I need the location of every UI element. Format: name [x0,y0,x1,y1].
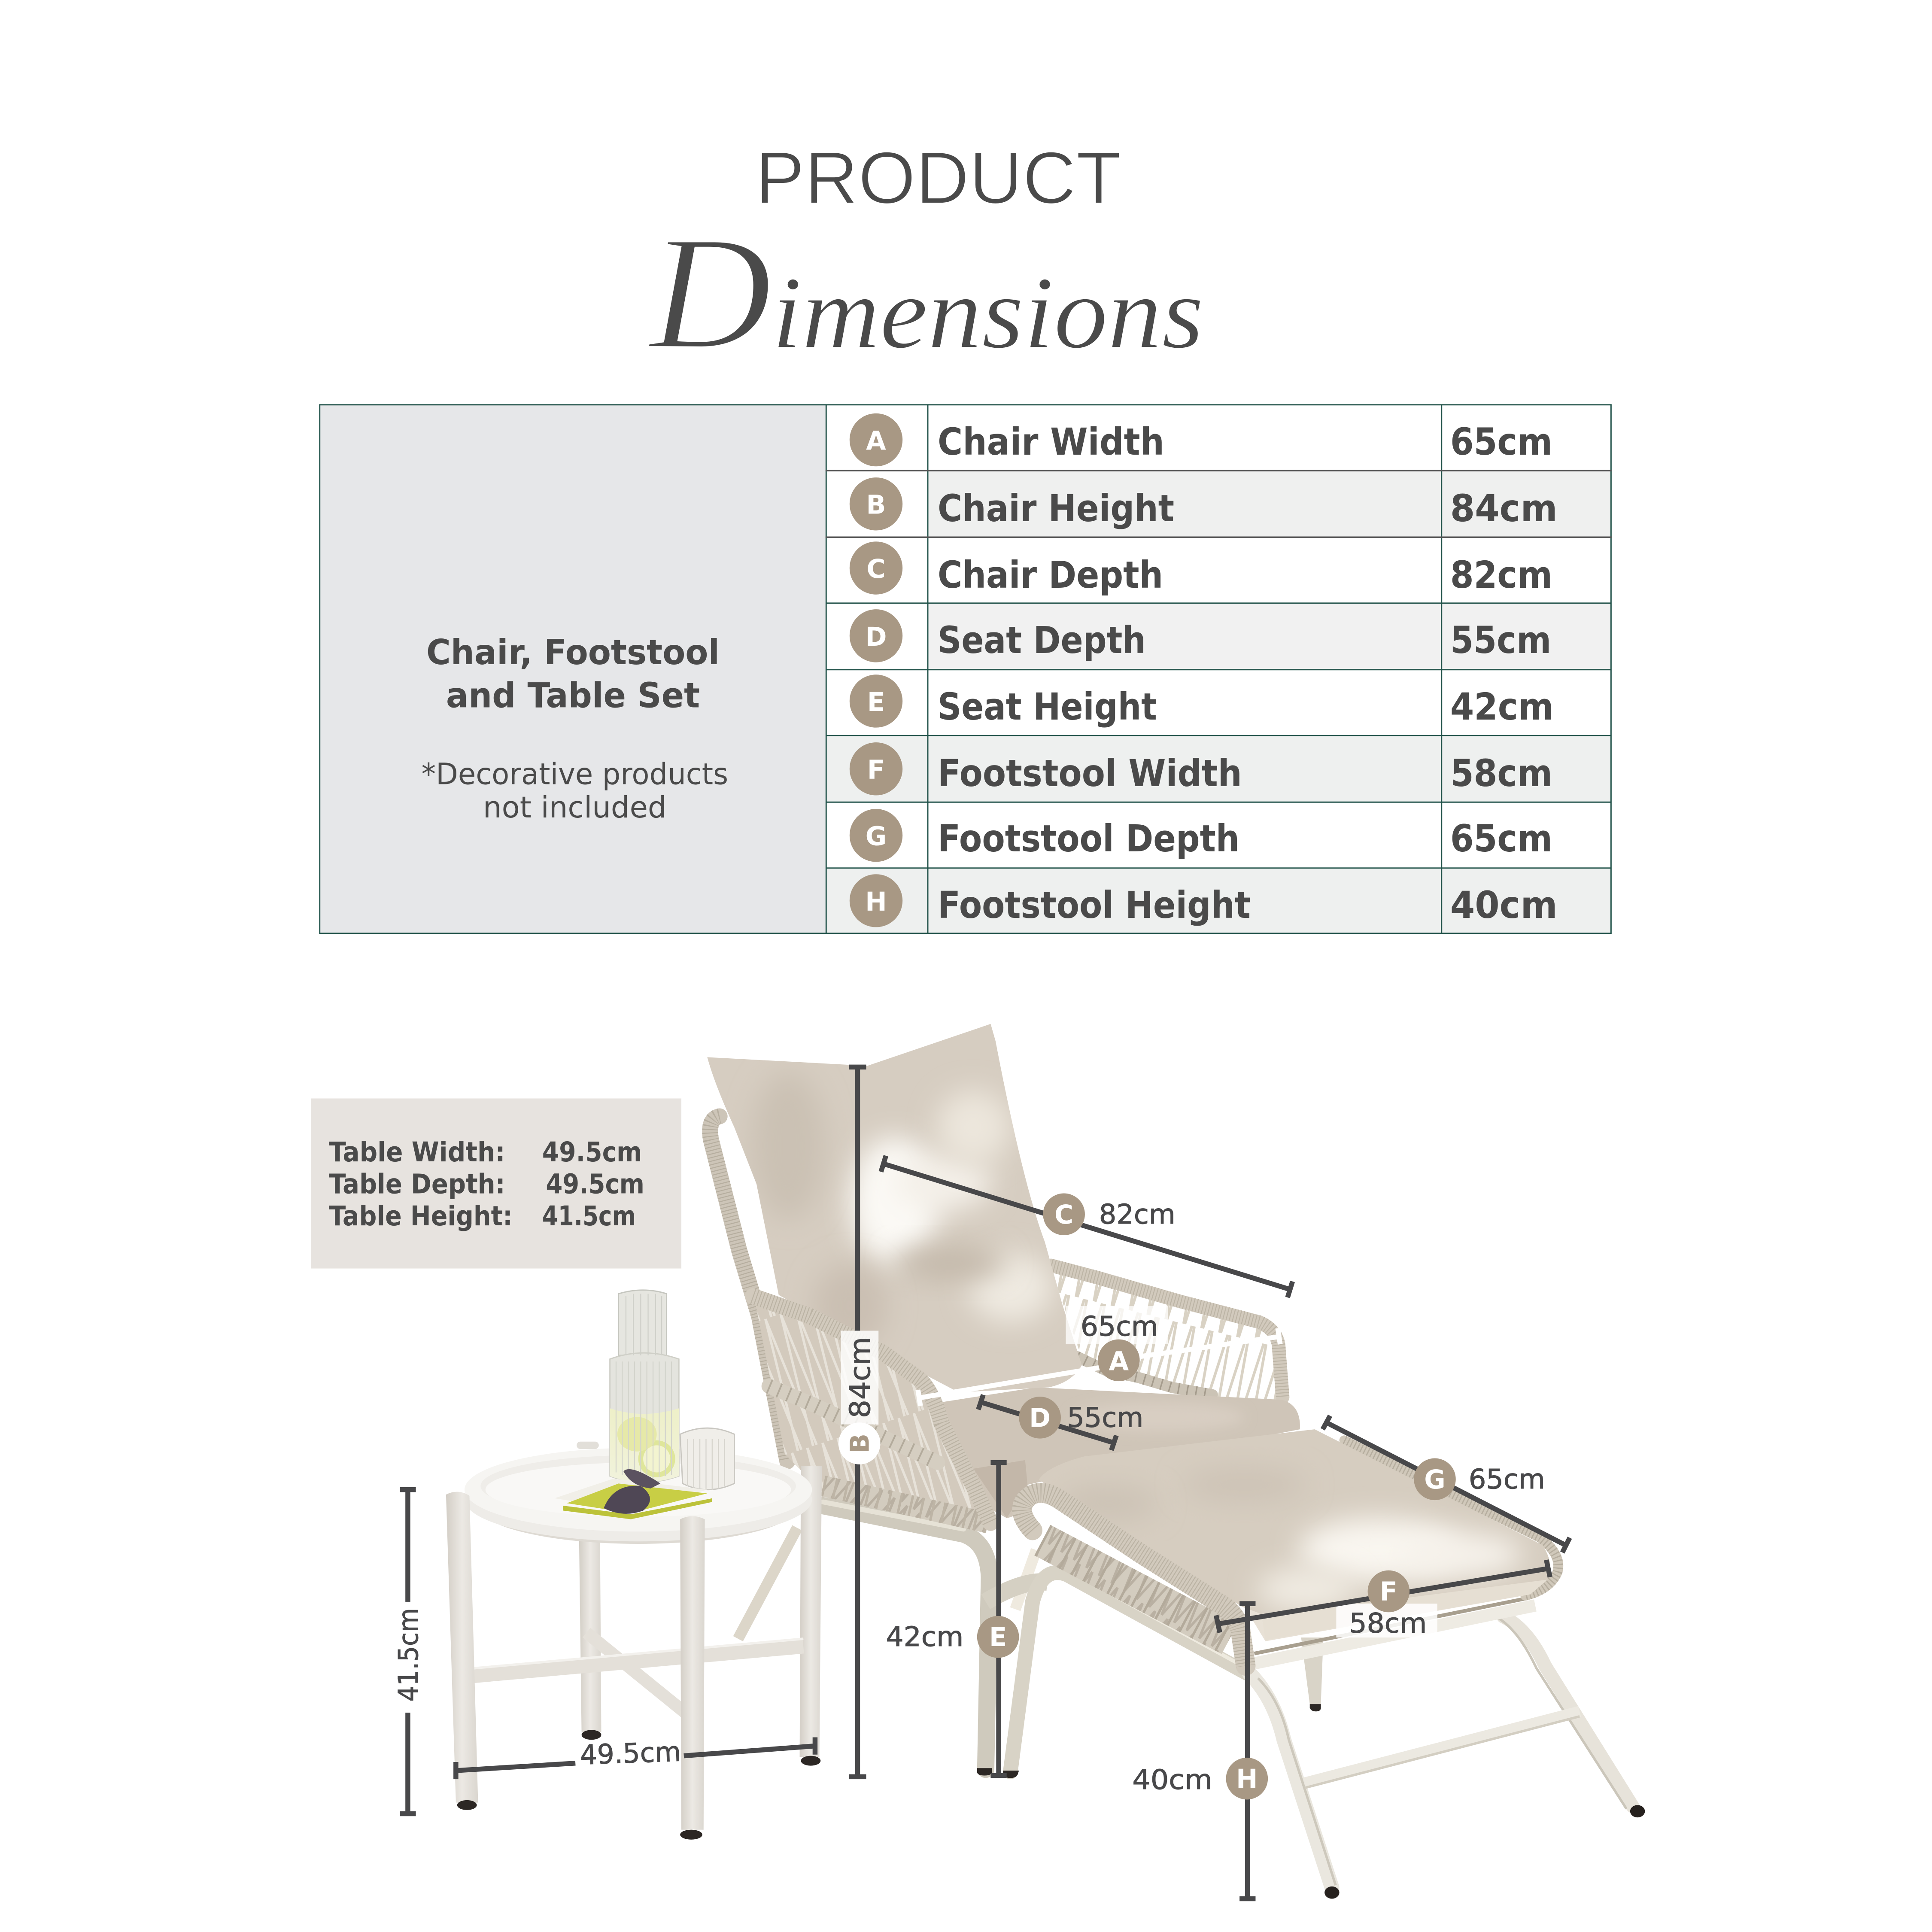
chair rear leg [738,1528,797,1639]
row F: Footstool Width [938,752,1242,795]
row E: E [867,687,885,717]
row C: C [866,554,886,584]
panel: table dimensions: 49.5cm [546,1168,644,1200]
specification table [320,404,1612,934]
title: PRODUCT: PRODUCT [755,137,1121,219]
set name heading [426,632,720,715]
row B: Chair Height [938,487,1174,530]
panel: table dimensions: 41.5cm [542,1200,636,1232]
row E: 42cm [1450,686,1554,729]
dimension A: chair width [918,1306,1280,1406]
panel: table dimensions [311,1099,681,1269]
dimension B: chair height: B [845,1434,875,1453]
panel: table dimensions: Table Height: [329,1200,513,1232]
row F: F [867,755,885,785]
dimension D: seat depth: 55cm [1067,1401,1143,1433]
row D: D [865,622,887,652]
dimension H: footstool height [1132,1604,1268,1899]
row H [850,874,1558,927]
panel: set description [320,404,826,934]
row B [850,477,1558,530]
bottom woven rail [823,1486,988,1523]
row C [850,541,1552,597]
panel: table dimensions: 49.5cm [542,1136,642,1168]
sunglasses [604,1469,660,1514]
row G [850,809,1552,862]
dimension E: seat height: E [989,1622,1007,1653]
dimension A: chair width: 65cm [1081,1310,1158,1342]
footstool rear leg [1301,1637,1323,1704]
dimension F: footstool width [1216,1560,1550,1639]
dimension H: footstool height: 40cm [1132,1764,1212,1795]
row A: A [866,426,886,456]
row G: 65cm [1450,817,1552,860]
dimension F: footstool width: 58cm [1349,1607,1427,1639]
footstool crossbar [1305,1711,1580,1783]
row A: 65cm [1450,421,1552,464]
row D: 55cm [1450,619,1551,662]
left arm rope [753,1296,990,1523]
dimension G: footstool depth: 65cm [1469,1463,1545,1495]
panel: table dimensions: Table Width: [329,1136,505,1168]
illustration: chair [707,1024,1300,1776]
dimension G: footstool depth: G [1424,1465,1446,1495]
set name heading: and Table Set [446,675,700,715]
dimension: table height [392,1490,424,1814]
note: decorative products: *Decorative products [422,757,728,792]
row H: Footstool Height [938,884,1251,927]
footstool front rail [1255,1605,1535,1663]
footstool cushion [1039,1429,1550,1641]
dimension B: chair height [838,1067,881,1777]
row F: 58cm [1450,752,1552,795]
dimension B: chair height: 84cm [844,1337,877,1418]
row A [850,413,1552,466]
dimension D: seat depth [978,1395,1143,1450]
row B: 84cm [1450,487,1558,530]
right arm rope [1051,1265,1283,1397]
title: Dimensions script: Dimensions [647,202,1204,383]
row F [850,742,1552,796]
row A: Chair Width [938,421,1164,464]
carafe [610,1290,679,1482]
dimension C: chair depth: 82cm [1099,1198,1176,1230]
panel: table dimensions: Table Depth: [329,1168,505,1200]
right arm strings [1051,1269,1282,1400]
dimension C: chair depth [881,1156,1293,1297]
table right leg [800,1466,822,1757]
illustration: side table [446,1290,822,1840]
row B: B [866,490,886,520]
seat cushion [942,1388,1300,1518]
table crossbars [473,1646,803,1676]
row G: G [866,822,887,852]
dimension E: seat height [886,1463,1019,1776]
footstool right rope [1344,1440,1558,1596]
footstool left rope [1022,1493,1245,1666]
row C: 82cm [1450,554,1552,597]
table front leg [680,1516,705,1830]
row H: 40cm [1450,884,1558,927]
dimension C: chair depth: C [1054,1200,1073,1230]
row G: Footstool Depth [938,817,1239,860]
note: decorative products: not included [483,790,667,825]
dimension G: footstool depth [1323,1416,1570,1552]
dimension: table height: 41.5cm [392,1608,424,1701]
dimension H: footstool height: H [1236,1764,1258,1794]
dimension: table width: 49.5cm [580,1736,681,1771]
table tray [465,1442,812,1544]
footstool right leg [1503,1616,1633,1806]
footstool weave [1042,1540,1230,1639]
dimension: table width [456,1736,815,1779]
row D [850,609,1551,662]
lower woven rail [769,1386,938,1463]
row E [850,674,1554,729]
back cushion [707,1024,1082,1392]
table rear leg [579,1540,601,1732]
illustration: footstool [1003,1429,1645,1899]
row C: Chair Depth [938,554,1163,597]
glass [680,1428,734,1490]
set name heading: Chair, Footstool [426,632,720,672]
footstool front leg [1249,1673,1332,1888]
row D: Seat Depth [938,619,1146,662]
left side panel strings [754,1296,990,1525]
right arm woven rail [1077,1357,1212,1395]
dimension E: seat height: 42cm [886,1621,963,1653]
row H: H [865,887,887,917]
table left leg [446,1492,478,1803]
dimension D: seat depth: D [1029,1403,1051,1433]
row E: Seat Height [938,686,1157,729]
back rope frame [710,1116,787,1461]
dimension F: footstool width: F [1380,1577,1397,1607]
chair front leg [823,1506,990,1769]
footstool left frame [1010,1573,1247,1772]
dimension A: chair width: A [1109,1346,1129,1376]
note: decorative products [422,757,728,825]
books [554,1479,712,1519]
